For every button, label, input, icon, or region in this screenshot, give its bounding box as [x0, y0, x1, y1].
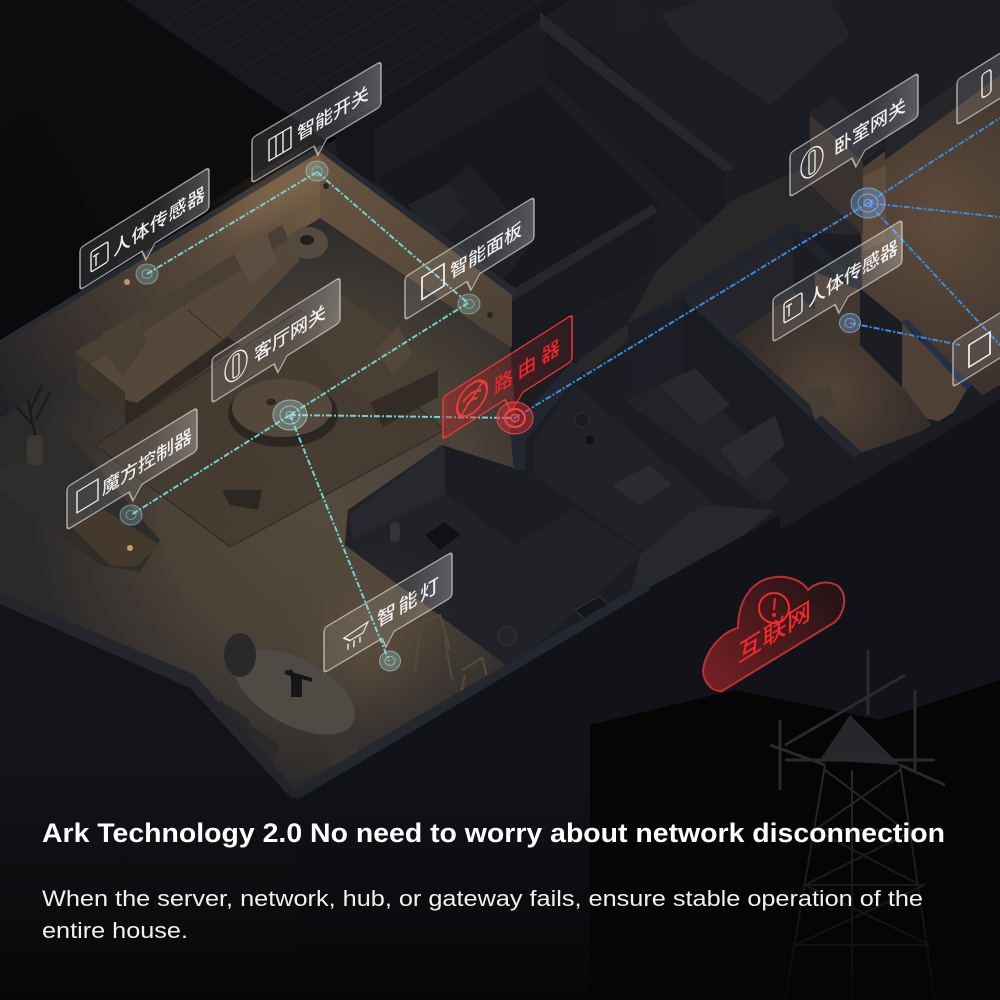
node: second sensor — [840, 314, 860, 332]
label text: 路由器 — [494, 336, 560, 399]
node: router — [497, 402, 533, 434]
right warm room — [808, 50, 1000, 423]
description text: When the server, network, hub, or gateway fails, ensure stable operation of the — [42, 886, 923, 911]
console and vase — [0, 430, 160, 572]
room walls — [335, 0, 735, 355]
icon: cube — [77, 479, 98, 513]
dining table set — [218, 632, 369, 775]
icon: panel — [422, 264, 444, 299]
internet cloud (failed) — [703, 577, 844, 691]
label text: 智能开关 — [297, 83, 369, 146]
lower right warm room and bathroom — [626, 222, 933, 540]
icon: lock — [982, 69, 991, 98]
icon: switch — [269, 127, 291, 161]
label text: 卧室网关 — [834, 95, 906, 160]
node: switch — [306, 161, 328, 181]
description text: entire house. — [42, 918, 188, 943]
planked balcony — [125, 0, 575, 140]
label: partial top right — [957, 2, 1000, 125]
icon: no wifi — [457, 374, 487, 423]
main sofa — [75, 225, 300, 425]
icon: sensor — [784, 292, 802, 323]
node: bedroom gateway — [851, 188, 885, 218]
top right bed — [616, 0, 870, 130]
label text: 智能面板 — [450, 219, 522, 284]
exterior front wall — [0, 385, 1000, 1000]
corridor floor — [515, 165, 865, 430]
label: smart panel — [405, 197, 534, 331]
donut pouf — [288, 227, 328, 259]
node: living room gateway — [273, 400, 307, 430]
bottom fade behind text — [0, 770, 1000, 1000]
label text: 人体传感器 — [808, 237, 898, 311]
icon: gateway — [225, 345, 247, 387]
label: cube controller — [67, 408, 197, 541]
warm light glow — [330, 585, 410, 695]
middle bedroom — [375, 85, 660, 300]
armchair — [213, 453, 270, 510]
warm living and dining floor — [0, 218, 520, 795]
dark rooms floor — [320, 0, 1000, 680]
icon: warning — [759, 593, 789, 623]
bar stools — [415, 615, 490, 698]
plant — [15, 385, 50, 435]
label text: 魔方控制器 — [102, 424, 192, 500]
network lines: blue mesh — [515, 118, 1000, 418]
description text — [42, 886, 923, 943]
label text: 人体传感器 — [113, 183, 205, 261]
rug — [95, 310, 445, 547]
node: smart light — [380, 651, 400, 671]
cloud text: 互联网 — [738, 596, 811, 668]
round coffee table — [228, 379, 338, 447]
node: panel — [458, 294, 480, 314]
kitchen — [345, 362, 777, 668]
living room walls — [0, 145, 515, 418]
label: living room gateway — [212, 277, 340, 414]
exterior wall upper left — [0, 0, 335, 350]
icon: panel — [969, 332, 990, 367]
side sofa — [310, 295, 440, 427]
label text: 客厅网关 — [254, 301, 326, 367]
label text: 智能灯 — [377, 574, 439, 632]
icon: gateway — [801, 141, 823, 183]
icon: sensor — [91, 242, 108, 272]
label: router (failed) — [443, 315, 572, 455]
label: bedroom gateway — [790, 73, 918, 208]
node: sensor — [136, 264, 158, 284]
node: cube controller — [120, 505, 142, 525]
label: smart switch — [252, 61, 381, 194]
label: smart light — [324, 552, 452, 684]
label: second human body sensor — [773, 220, 902, 353]
heading: Ark Technology 2.0 No need to worry about network disconnection — [42, 818, 945, 848]
label: human body sensor — [80, 167, 209, 301]
radio tower — [770, 650, 945, 1000]
label: partial right — [953, 264, 1000, 387]
icon: lamp — [344, 622, 368, 653]
network lines: cyan mesh — [131, 172, 515, 661]
